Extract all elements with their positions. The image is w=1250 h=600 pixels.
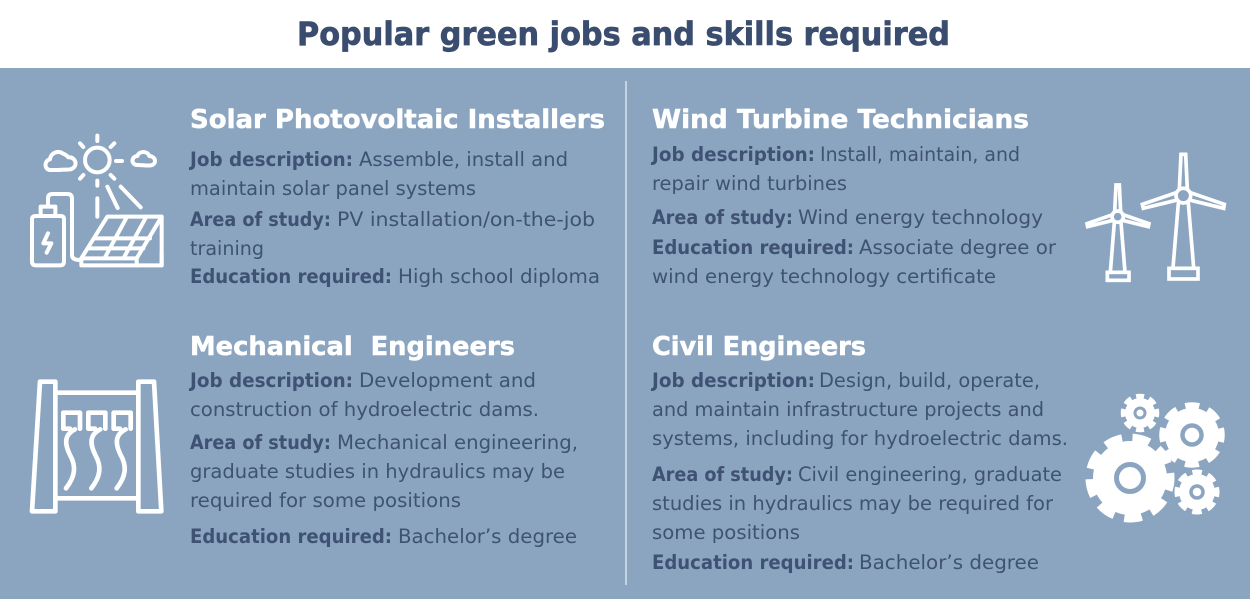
text block: solar details: High school diploma <box>398 265 600 288</box>
text block: mechanical details: construction of hydroelectric dams. <box>190 398 539 421</box>
heading: mechanical: Mechanical Engineers <box>190 332 515 362</box>
text block: solar details: Education required: <box>190 265 392 288</box>
text block: solar details: training <box>190 237 264 260</box>
text block: civil details: systems, including for hydroelectric dams. <box>652 427 1068 450</box>
text block: civil details: Design, build, operate, <box>819 369 1040 392</box>
text block: wind details: Area of study: <box>652 206 793 229</box>
text block: civil details: some positions <box>652 521 800 544</box>
text block: civil details: Civil engineering, graduate <box>798 463 1062 486</box>
icon: hydroelectric dam <box>32 382 161 511</box>
text block: mechanical details: Job description: <box>188 369 353 392</box>
text block: civil details: Area of study: <box>652 463 793 486</box>
text block: mechanical details: Education required: <box>190 525 392 548</box>
text block: wind details: Job description: <box>650 143 815 166</box>
text block: wind details <box>650 143 1057 288</box>
panel: mechanical engineers <box>32 332 578 548</box>
text block: mechanical details: Development and <box>359 369 536 392</box>
text block: mechanical details: Mechanical engineering, <box>337 431 578 454</box>
text block: solar details: maintain solar panel systems <box>190 177 476 200</box>
text block: solar details: Job description: <box>188 148 353 171</box>
text block: solar details: Assemble, install and <box>359 148 568 171</box>
text block: wind details: repair wind turbines <box>652 172 847 195</box>
panel: solar photovoltaic installers <box>32 105 605 288</box>
text block: civil details: studies in hydraulics may be required for <box>652 492 1054 515</box>
text block: civil details: Education required: <box>652 551 854 574</box>
text block: mechanical details <box>188 369 578 548</box>
text block: wind details: Wind energy technology <box>798 206 1043 229</box>
text block: civil details: and maintain infrastructure projects and <box>652 398 1044 421</box>
text block: civil details <box>650 369 1068 574</box>
heading: civil: Civil Engineers <box>652 332 866 362</box>
text block: wind details: Associate degree or <box>859 236 1057 259</box>
text block: civil details: Job description: <box>650 369 815 392</box>
text block: mechanical details: Bachelor’s degree <box>398 525 577 548</box>
text block: wind details: Education required: <box>652 236 854 259</box>
text block: mechanical details: required for some positions <box>190 489 461 512</box>
icon: solar panel, sun and battery <box>32 136 162 265</box>
panel: civil engineers <box>650 332 1228 574</box>
text block: solar details: PV installation/on-the-job <box>337 208 595 231</box>
text block: wind details: Install, maintain, and <box>820 143 1020 166</box>
heading: wind: Wind Turbine Technicians <box>652 105 1029 135</box>
text block: civil details: Bachelor’s degree <box>859 551 1039 574</box>
icon: wind turbines <box>1087 154 1224 280</box>
text block: mechanical details: graduate studies in hydraulics may be <box>190 460 565 483</box>
panel: wind turbine technicians <box>650 105 1224 288</box>
heading: solar: Solar Photovoltaic Installers <box>190 105 605 135</box>
text block: wind details: wind energy technology certificate <box>652 265 996 288</box>
text block: mechanical details: Area of study: <box>190 431 331 454</box>
text block: solar details: Area of study: <box>190 208 331 231</box>
icon: gears <box>1085 393 1228 523</box>
title: Popular green jobs and skills required <box>297 15 950 53</box>
text block: solar details <box>188 148 600 288</box>
